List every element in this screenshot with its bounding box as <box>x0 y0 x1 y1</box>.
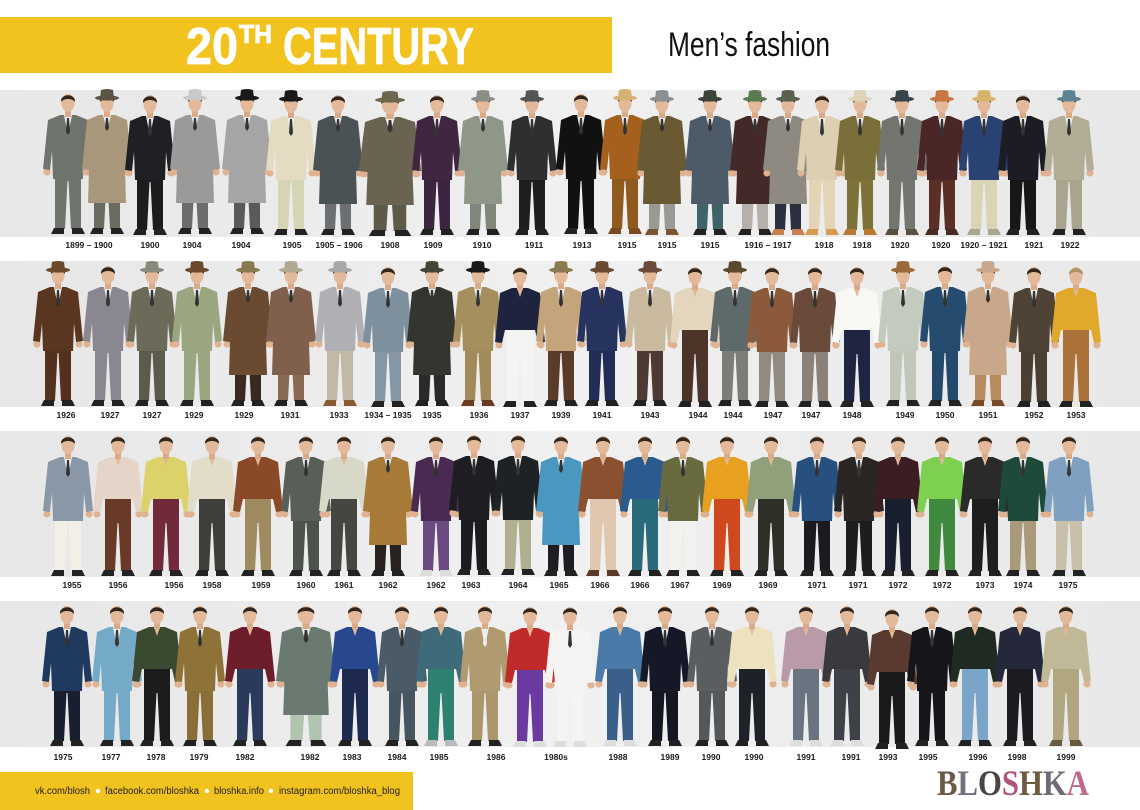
year labels: row 1: 1899 – 1900 <box>65 240 113 250</box>
figure: 1916 <box>730 90 780 235</box>
year labels: row 4: 1978 <box>147 752 166 762</box>
year labels: row 4: 1993 <box>879 752 898 762</box>
figure: 1915 rust <box>600 89 650 234</box>
figure: 1975 <box>42 606 92 746</box>
panel: row 4 background <box>0 601 1140 747</box>
figure: 1988 <box>595 606 645 746</box>
footer links: vk.com/blosh <box>35 786 90 797</box>
figure: 1983 <box>330 606 380 746</box>
year labels: row 3: 1959 <box>252 580 271 590</box>
year labels: row 1: 1908 <box>381 240 400 250</box>
year labels: row 1: 1910 <box>473 240 492 250</box>
figure: 1989 <box>640 606 690 746</box>
year labels: row 3: 1962 <box>379 580 398 590</box>
figure: 1956 shirt <box>93 436 143 576</box>
figure: 1908 cape <box>359 91 421 236</box>
panel: row 1 background <box>0 90 1140 237</box>
year labels: row 4: 1985 <box>430 752 449 762</box>
figure: 1927 knickers <box>127 261 177 406</box>
figure: 1971 blue <box>792 436 842 576</box>
figure: 1948 <box>832 267 882 407</box>
figure: 1962 purple <box>411 436 461 576</box>
figure: 1985 <box>416 606 466 746</box>
figure: 1920-1921 <box>959 90 1009 235</box>
year labels: row 2: 1936 <box>470 410 489 420</box>
year labels: row 3: 1967 <box>671 580 690 590</box>
figure: 1929 coat <box>223 261 273 406</box>
figure: 1918 cream <box>797 95 847 235</box>
figure: 1995 <box>907 606 957 746</box>
figure: 1905-1906 <box>313 95 363 235</box>
year labels: row 4: 1986 <box>487 752 506 762</box>
year labels: row 3: 1956 <box>109 580 128 590</box>
figure: 1963 <box>449 435 499 575</box>
logo: Bloshka: BLOSHKA <box>937 763 1089 803</box>
year labels: row 3 <box>63 580 1078 590</box>
figure: 1920 maroon <box>917 90 967 235</box>
figure: 1944 shirt <box>670 267 720 407</box>
year labels: row 4: 1975 <box>54 752 73 762</box>
year labels: row 1: 1911 <box>525 240 543 250</box>
figure: 1966 brown <box>578 436 628 576</box>
year labels: row 3: 1966 <box>591 580 610 590</box>
year labels: row 4: 1998 <box>1008 752 1027 762</box>
year labels: row 1: 1913 <box>573 240 592 250</box>
figure: 1969 green <box>746 436 796 576</box>
panel: row 3 background <box>0 431 1140 577</box>
title <box>186 18 474 76</box>
figure: 1982 coat <box>276 606 336 746</box>
year labels: row 2: 1929 <box>185 410 204 420</box>
figure: 1962 duffle <box>363 436 413 576</box>
year labels: row 3: 1973 <box>976 580 995 590</box>
panel: footer bar <box>0 772 413 810</box>
title: TH <box>239 19 272 49</box>
figure: 1915 blue coat <box>685 90 735 235</box>
year labels: row 2: 1926 <box>57 410 76 420</box>
year labels: row 2: 1929 <box>235 410 254 420</box>
title: 20 <box>186 18 238 76</box>
figure: 1947 brown <box>747 267 797 407</box>
year labels: row 3: 1972 <box>933 580 952 590</box>
year labels: row 4: 1988 <box>609 752 628 762</box>
figure: 1978 <box>132 606 182 746</box>
year labels: row 4 <box>54 752 1076 762</box>
figures: row 4, 1975 to 1999 <box>42 606 1091 749</box>
year labels: row 2: 1939 <box>552 410 571 420</box>
figure: 1958 <box>187 436 237 576</box>
figures: row 3, 1955 to 1975 <box>43 435 1094 576</box>
year labels: row 1: 1915 <box>658 240 677 250</box>
year labels: row 1: 1915 <box>701 240 720 250</box>
figure: 1941 <box>577 261 627 406</box>
year labels: row 4: 1991 <box>797 752 816 762</box>
year labels: row 3: 1972 <box>889 580 908 590</box>
year labels: row 3: 1971 <box>849 580 868 590</box>
year labels: row 3: 1969 <box>713 580 732 590</box>
figure: 1899 <box>43 94 93 234</box>
year labels: row 1: 1904 <box>232 240 251 250</box>
subtitle: Men’s fashion <box>668 26 830 64</box>
figure: 1959 <box>233 436 283 576</box>
year labels: row 2: 1944 <box>689 410 708 420</box>
figure: 1929 green <box>172 261 222 406</box>
figure: 1955 <box>43 436 93 576</box>
figure: 1911 <box>507 90 557 235</box>
year labels: row 1: 1918 <box>853 240 872 250</box>
figure: 1990 cream <box>727 606 777 746</box>
year labels: row 2: 1953 <box>1067 410 1086 420</box>
year labels: row 2: 1934 – 1935 <box>364 410 412 420</box>
figure: 1939 <box>536 261 586 406</box>
year labels: row 3: 1956 <box>165 580 184 590</box>
year labels: row 1: 1921 <box>1025 240 1044 250</box>
figure: 1990 grey <box>687 606 737 746</box>
figure: 1947 dark <box>790 267 840 407</box>
figure: 1969 orange <box>702 436 752 576</box>
figure: 1974 <box>998 436 1048 576</box>
year labels: row 4: 1977 <box>102 752 121 762</box>
figure: 1937 <box>495 267 545 407</box>
figure: 1920 grey <box>877 90 927 235</box>
year labels: row 3: 1962 <box>427 580 446 590</box>
figure: 1953 <box>1051 267 1101 407</box>
figure: 1977 <box>92 606 142 746</box>
year labels: row 3: 1965 <box>550 580 569 590</box>
year labels: row 4: 1979 <box>190 752 209 762</box>
year labels: row 3: 1969 <box>759 580 778 590</box>
year labels: row 2: 1951 <box>979 410 998 420</box>
title: CENTURY <box>283 18 474 76</box>
year labels: row 4: 1990 <box>745 752 764 762</box>
figure: 1961 <box>319 436 369 576</box>
year labels: row 4: 1991 <box>842 752 861 762</box>
figure: 1996 <box>950 606 1000 746</box>
figure: 1999 <box>1041 606 1091 746</box>
figure: 1982 red <box>225 606 275 746</box>
figure: 1975 <box>1044 436 1094 576</box>
figure: 1943 <box>625 261 675 406</box>
year labels: row 4: 1984 <box>388 752 407 762</box>
year labels: row 2: 1948 <box>843 410 862 420</box>
year labels: row 4: 1983 <box>343 752 362 762</box>
figure: 1972 green <box>917 436 967 576</box>
figure: 1905 <box>266 90 316 235</box>
figure: 1904 top hat <box>222 89 272 234</box>
year labels: row 4: 1996 <box>969 752 988 762</box>
figure: 1991 print <box>781 606 831 746</box>
figure: 1980s red <box>505 607 555 747</box>
figure: 1984 <box>377 606 427 746</box>
year labels: row 2: 1949 <box>896 410 915 420</box>
figures: row 1, 1899 to 1922 <box>43 89 1094 236</box>
year labels: row 2: 1952 <box>1025 410 1044 420</box>
year labels: row 4: 1989 <box>661 752 680 762</box>
figure: 1965 <box>536 436 586 576</box>
figure: 1966 blue <box>620 436 670 576</box>
figure: 1935 <box>407 261 457 406</box>
year labels: row 2: 1947 <box>802 410 821 420</box>
year labels: row 2: 1933 <box>330 410 349 420</box>
figure: 1952 <box>1009 267 1059 407</box>
year labels: row 2: 1941 <box>593 410 612 420</box>
figure: 1918 olive <box>835 90 885 235</box>
year labels: row 1: 1905 <box>283 240 302 250</box>
figure: 1926 <box>33 261 83 406</box>
figure: 1917 <box>763 90 813 235</box>
footer links: instagram.com/bloshka_blog <box>279 786 400 797</box>
year labels: row 3: 1961 <box>335 580 354 590</box>
figure: 1979 <box>175 606 225 746</box>
year labels: row 3: 1955 <box>63 580 82 590</box>
year labels: row 1: 1920 <box>932 240 951 250</box>
year labels: row 1: 1922 <box>1061 240 1080 250</box>
footer links <box>35 786 400 797</box>
figure: 1951 <box>963 261 1013 406</box>
figure: 1900 dark suit <box>125 95 175 235</box>
figure: 1960 <box>281 436 331 576</box>
year labels: row 2: 1935 <box>423 410 442 420</box>
figure: 1986 <box>460 606 510 746</box>
year labels: row 2: 1947 <box>764 410 783 420</box>
footer links: bloshka.info <box>214 786 264 797</box>
figure: 1949 <box>878 261 928 406</box>
year labels: row 2 <box>57 410 1086 420</box>
figure: 1900 <box>82 89 132 234</box>
figure: 1991 sweater <box>822 606 872 746</box>
year labels: row 2: 1943 <box>641 410 660 420</box>
year labels: row 1: 1916 – 1917 <box>744 240 792 250</box>
year labels: row 1: 1920 – 1921 <box>960 240 1008 250</box>
figure: 1909 <box>412 95 462 235</box>
year labels: row 3: 1964 <box>509 580 528 590</box>
figure: 1956 yellow <box>141 436 191 576</box>
figure: 1934-1935 <box>363 267 413 407</box>
year labels: row 2: 1944 <box>724 410 743 420</box>
figure: 1904 grey coat <box>170 89 220 234</box>
figure: 1921 <box>998 95 1048 235</box>
year labels: row 1: 1909 <box>424 240 443 250</box>
figure: 1936 <box>453 261 503 406</box>
year labels: row 2: 1927 <box>101 410 120 420</box>
year labels: row 4: 1982 <box>236 752 255 762</box>
year labels: row 3: 1974 <box>1014 580 1033 590</box>
figure: 1967 <box>658 436 708 576</box>
figures: row 2, 1926 to 1953 <box>33 261 1101 407</box>
year labels: row 3: 1963 <box>462 580 481 590</box>
year labels: row 4: 1980s <box>544 752 568 762</box>
figure: 1980s white <box>545 607 595 747</box>
panel: row 2 background <box>0 261 1140 407</box>
year labels: row 4: 1995 <box>919 752 938 762</box>
year labels: row 3: 1966 <box>631 580 650 590</box>
figure: 1927 grey <box>83 266 133 406</box>
year labels: row 1: 1905 – 1906 <box>315 240 363 250</box>
figure: 1972 dark <box>873 436 923 576</box>
panel: title banner <box>0 17 612 73</box>
year labels: row 3: 1975 <box>1059 580 1078 590</box>
footer links: facebook.com/bloshka <box>105 786 199 797</box>
year labels: row 1: 1900 <box>141 240 160 250</box>
year labels: row 2: 1950 <box>936 410 955 420</box>
figure: 1910 <box>458 90 508 235</box>
year labels: row 4: 1990 <box>702 752 721 762</box>
figure: 1973 <box>960 436 1010 576</box>
figure: 1971 dark <box>834 436 884 576</box>
year labels: row 1 <box>65 240 1080 250</box>
figure: 1944 grey <box>710 261 760 406</box>
year labels: row 1: 1904 <box>183 240 202 250</box>
figure: 1964 <box>493 435 543 575</box>
figure: 1950 <box>920 266 970 406</box>
year labels: row 3: 1971 <box>808 580 827 590</box>
figure: 1931 <box>266 261 316 406</box>
year labels: row 1: 1920 <box>891 240 910 250</box>
year labels: row 2: 1937 <box>511 410 530 420</box>
figure: 1915 olive coat <box>637 90 687 235</box>
figure: 1933 <box>315 261 365 406</box>
figure: 1993 <box>867 609 917 749</box>
year labels: row 2: 1931 <box>281 410 300 420</box>
figure: 1922 <box>1044 90 1094 235</box>
year labels: row 2: 1927 <box>143 410 162 420</box>
year labels: row 4: 1982 <box>301 752 320 762</box>
figure: 1998 <box>995 606 1045 746</box>
figure: 1913 <box>556 94 606 234</box>
year labels: row 1: 1915 <box>618 240 637 250</box>
year labels: row 3: 1960 <box>297 580 316 590</box>
year labels: row 1: 1918 <box>815 240 834 250</box>
year labels: row 3: 1958 <box>203 580 222 590</box>
year labels: row 4: 1999 <box>1057 752 1076 762</box>
